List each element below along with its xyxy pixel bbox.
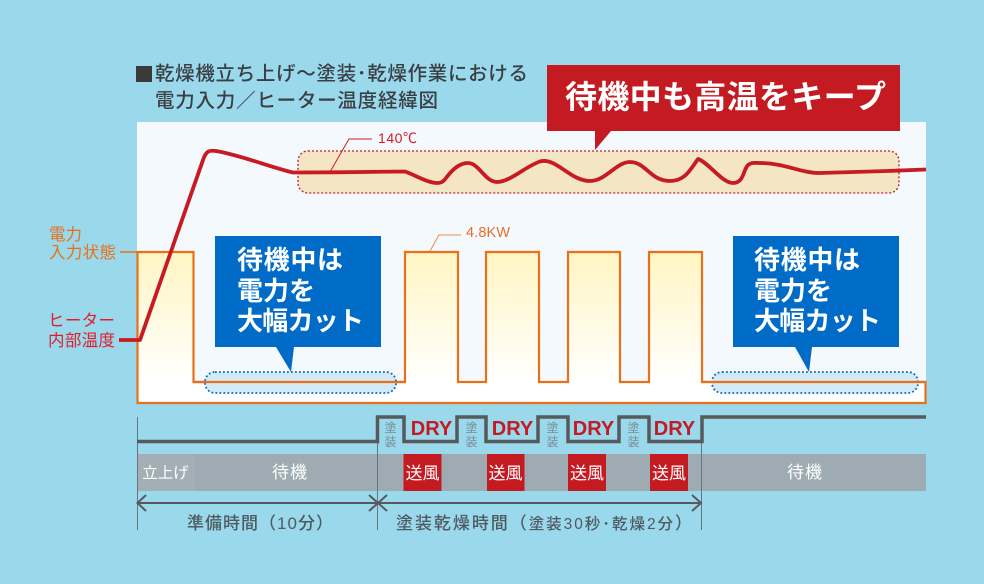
vertical guide lines (138, 417, 702, 530)
callout: right power cut: 大幅カット (754, 306, 881, 336)
spray labels: 装 (384, 435, 397, 449)
label: power input state (49, 225, 137, 262)
dry labels: DRY (654, 418, 696, 440)
callout: 4.8KW (430, 225, 510, 251)
spray and dry step line (137, 417, 926, 442)
heading: 電力入力／ヒーター温度経緯図 (155, 90, 438, 112)
highlight oval: left standby (205, 372, 396, 393)
spray labels: 塗 (546, 421, 559, 435)
spray labels: 装 (627, 435, 640, 449)
heading: 乾燥機立ち上げ〜塗装･乾燥作業における (155, 63, 528, 85)
spray labels: 塗 (384, 421, 397, 435)
spray labels: 装 (465, 435, 478, 449)
spray labels: 塗 (627, 421, 640, 435)
callout: right power cut: 待機中は (754, 245, 860, 275)
label: heater internal temperature: ヒーター (48, 311, 115, 330)
operation state bar: 待機 (787, 463, 823, 482)
blower blocks: 送風 (570, 464, 604, 483)
label: power input state: 電力 (49, 225, 82, 244)
callout: left power cut: 待機中は (237, 245, 343, 275)
callout: left power cut: 大幅カット (237, 306, 364, 336)
highlight oval: right standby (712, 372, 918, 393)
callout: right power cut: 電力を (754, 276, 832, 306)
arrow: preparation time (138, 495, 378, 511)
dry labels: DRY (573, 418, 615, 440)
panel: chart area (137, 122, 926, 404)
label: preparation time: 準備時間（10分） (187, 514, 333, 533)
dry labels (411, 418, 696, 440)
blower blocks (404, 454, 688, 491)
redraw power baseline over ovals (194, 381, 926, 383)
callout: keep high temperature (547, 65, 900, 150)
heading (136, 63, 528, 112)
label: heater internal temperature (48, 311, 115, 350)
power input chart (137, 252, 926, 403)
label: power input state: 入力状態 (49, 243, 116, 262)
operation state bar: 待機 (272, 463, 308, 482)
spray labels: 塗 (465, 421, 478, 435)
callout: right power cut (733, 236, 899, 372)
operation state bar (137, 454, 926, 491)
callout: 4.8KW: 4.8KW (466, 225, 510, 241)
callout: keep high temperature: 待機中も高温をキープ (565, 79, 886, 115)
callout: left power cut (215, 236, 381, 372)
highlight band: high temperature (298, 151, 899, 193)
spray labels: 装 (546, 435, 559, 449)
callout: 140C (330, 130, 417, 172)
operation state bar: 立上げ (142, 464, 189, 482)
blower blocks: 送風 (406, 464, 440, 483)
dry labels: DRY (411, 418, 453, 440)
dry labels: DRY (492, 418, 534, 440)
callout: 140C: 140℃ (378, 130, 417, 146)
blower blocks: 送風 (652, 464, 686, 483)
spray labels (384, 421, 640, 449)
blower blocks: 送風 (488, 464, 522, 483)
heater temperature line (119, 151, 926, 340)
arrow: spray and dry time (378, 495, 701, 511)
label: heater internal temperature: 内部温度 (48, 331, 115, 350)
callout: left power cut: 電力を (237, 276, 315, 306)
label: spray and dry time: 塗装乾燥時間（塗装30秒･乾燥2分） (396, 514, 692, 533)
